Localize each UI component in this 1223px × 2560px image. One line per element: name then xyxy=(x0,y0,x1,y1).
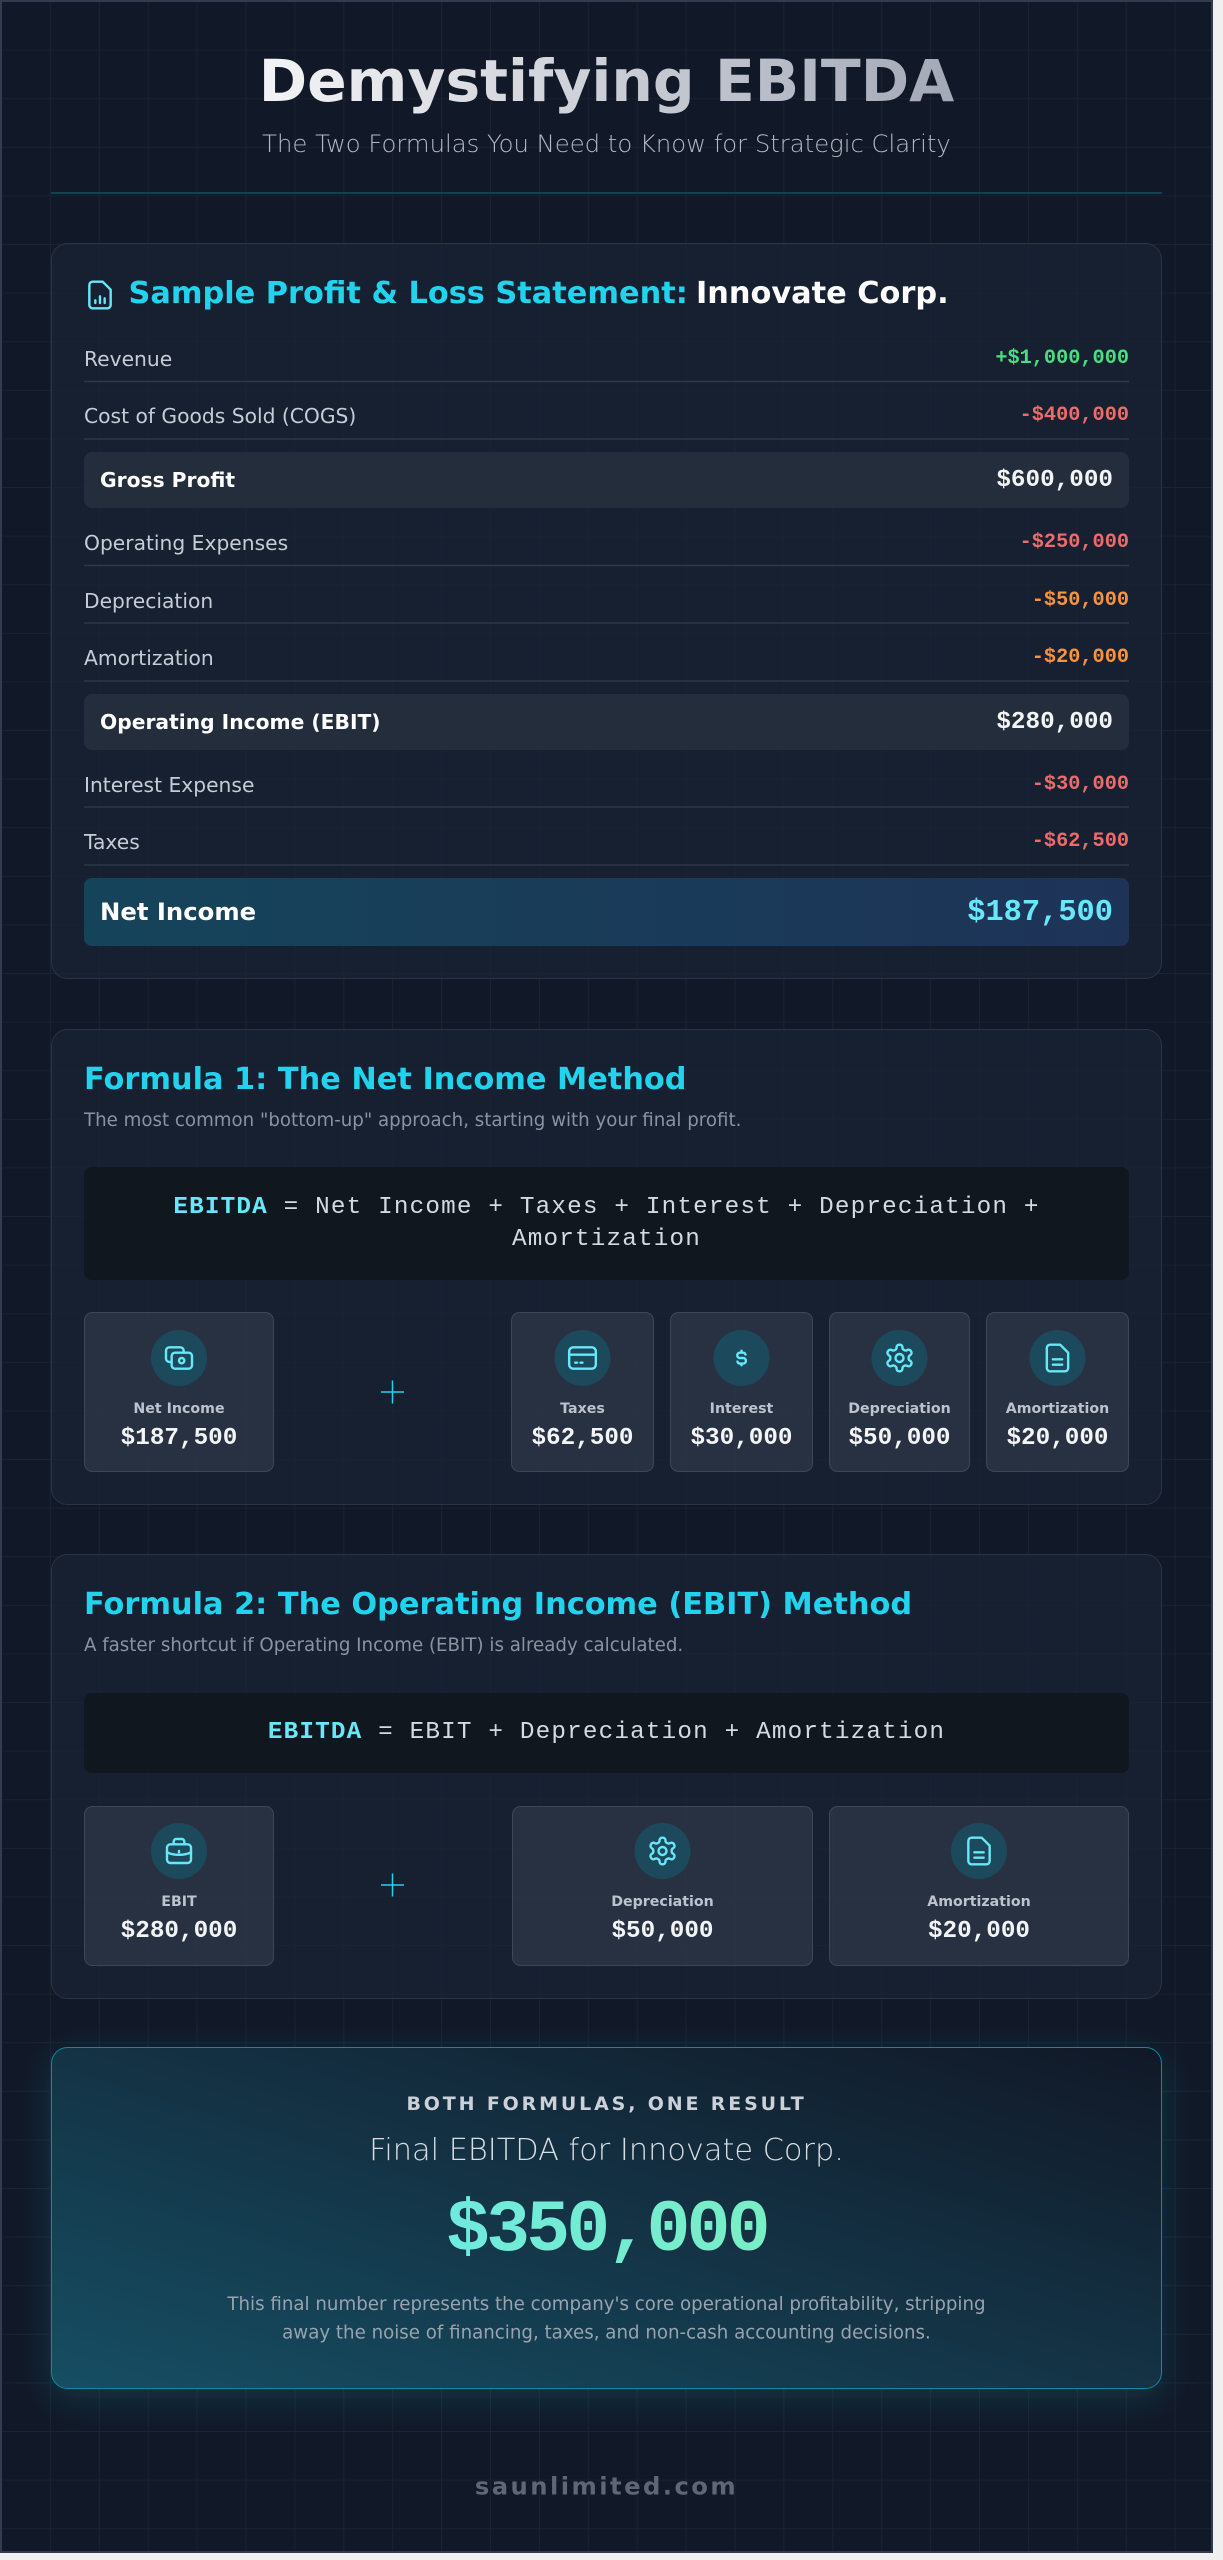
row: gross profit: Gross Profit xyxy=(100,468,235,492)
row: net income xyxy=(84,878,1129,946)
row: revenue: Revenue xyxy=(84,347,172,371)
row: gross profit xyxy=(84,452,1129,508)
subtitle: The Two Formulas You Need to Know for Strategic Clarity xyxy=(262,129,951,158)
formula 2 equation xyxy=(84,1693,1129,1773)
panel: formula 2 xyxy=(52,1554,1162,1998)
icon: gear xyxy=(887,1345,912,1371)
card: amortization: Amortization xyxy=(1006,1401,1109,1417)
footer brand: saunlimited.com xyxy=(475,2472,738,2500)
row: net income: $187,500 xyxy=(967,896,1113,930)
card: amortization: $20,000 xyxy=(928,1918,1030,1945)
card: net income: Net Income xyxy=(133,1401,225,1417)
result description: This final number represents the company's core operational profitability, stripping xyxy=(226,2294,986,2315)
card: amortization: Amortization xyxy=(927,1894,1031,1910)
header divider xyxy=(51,192,1162,194)
card: taxes: $62,500 xyxy=(531,1425,634,1452)
row: operating income: Operating Income (EBIT) xyxy=(100,710,381,734)
row: taxes xyxy=(83,830,1129,865)
row: operating income: $280,000 xyxy=(996,709,1113,736)
panel: final result xyxy=(51,2048,1162,2398)
panel: profit and loss statement xyxy=(52,244,1162,978)
formula 1 equation: Amortization xyxy=(512,1226,701,1253)
icon: document xyxy=(1047,1345,1068,1371)
row: interest expense: Interest Expense xyxy=(84,773,254,797)
icon: document xyxy=(968,1838,990,1864)
icon: plus xyxy=(381,1380,404,1404)
row: operating expenses xyxy=(84,531,1129,566)
card: interest: Interest xyxy=(710,1401,774,1417)
result description xyxy=(226,2294,986,2344)
row: taxes: Taxes xyxy=(83,830,140,854)
card: depreciation xyxy=(830,1312,970,1472)
icon: credit card xyxy=(569,1347,596,1369)
row: gross profit: $600,000 xyxy=(996,467,1113,494)
formula 1 heading: Formula 1: The Net Income Method xyxy=(84,1062,687,1097)
formula 2 equation: EBITDA = EBIT + Depreciation + Amortization xyxy=(268,1719,945,1746)
result heading: Final EBITDA for Innovate Corp. xyxy=(369,2133,844,2168)
icon: gear xyxy=(650,1838,675,1864)
card: ebit: $280,000 xyxy=(121,1918,237,1945)
row: operating income xyxy=(84,694,1129,750)
formula 1 equation: EBITDA = Net Income + Taxes + Interest + Depreciation + xyxy=(173,1194,1040,1221)
row: net income: Net Income xyxy=(100,897,256,926)
icon: briefcase xyxy=(167,1839,191,1863)
panel: formula 1 xyxy=(52,1030,1162,1504)
row: depreciation: Depreciation xyxy=(84,589,213,613)
row: revenue: +$1,000,000 xyxy=(995,347,1129,370)
title: Demystifying EBITDA xyxy=(259,47,954,115)
row: cogs xyxy=(84,404,1129,439)
card: taxes xyxy=(512,1312,654,1472)
icon: document with bar chart xyxy=(89,282,111,308)
statement heading: Sample Profit & Loss Statement: Innovate Corp. xyxy=(128,276,949,311)
icon: money xyxy=(166,1347,192,1369)
result eyebrow: BOTH FORMULAS, ONE RESULT xyxy=(406,2093,807,2115)
card: depreciation xyxy=(512,1806,812,1966)
card: depreciation: $50,000 xyxy=(611,1918,714,1945)
row: taxes: -$62,500 xyxy=(1032,830,1129,853)
card: interest xyxy=(670,1312,812,1472)
card: depreciation: Depreciation xyxy=(848,1401,951,1417)
row: operating expenses: -$250,000 xyxy=(1020,531,1129,554)
card: ebit: EBIT xyxy=(161,1894,197,1910)
card: net income: $187,500 xyxy=(121,1425,237,1452)
row: depreciation xyxy=(84,589,1129,623)
result description: away the noise of financing, taxes, and non-cash accounting decisions. xyxy=(282,2322,931,2344)
icon: plus xyxy=(381,1874,404,1896)
card: amortization xyxy=(830,1806,1128,1966)
row: interest expense: -$30,000 xyxy=(1032,773,1129,796)
formula 2 heading: Formula 2: The Operating Income (EBIT) Method xyxy=(84,1587,912,1622)
formula 2 description: A faster shortcut if Operating Income (EBIT) is already calculated. xyxy=(84,1635,683,1656)
card: amortization: $20,000 xyxy=(1006,1425,1109,1452)
card: interest: $30,000 xyxy=(690,1425,793,1452)
formula 1 description: The most common "bottom-up" approach, starting with your final profit. xyxy=(83,1110,741,1131)
card: depreciation: $50,000 xyxy=(848,1425,951,1452)
row: amortization xyxy=(84,646,1129,681)
row: depreciation: -$50,000 xyxy=(1032,589,1129,612)
row: cogs: Cost of Goods Sold (COGS) xyxy=(84,404,356,428)
card: depreciation: Depreciation xyxy=(611,1894,714,1910)
row: operating expenses: Operating Expenses xyxy=(84,531,288,555)
row: cogs: -$400,000 xyxy=(1020,404,1129,427)
card: taxes: Taxes xyxy=(560,1401,605,1417)
formula 1 equation xyxy=(84,1167,1129,1280)
row: amortization: -$20,000 xyxy=(1032,646,1129,669)
row: amortization: Amortization xyxy=(84,646,214,670)
card: amortization xyxy=(986,1312,1128,1472)
icon: dollar xyxy=(737,1351,746,1365)
row: interest expense xyxy=(84,773,1129,807)
card: ebit xyxy=(84,1806,274,1966)
card: net income xyxy=(84,1312,274,1472)
row: revenue xyxy=(84,347,1129,382)
result value: $350,000 xyxy=(446,2189,767,2272)
